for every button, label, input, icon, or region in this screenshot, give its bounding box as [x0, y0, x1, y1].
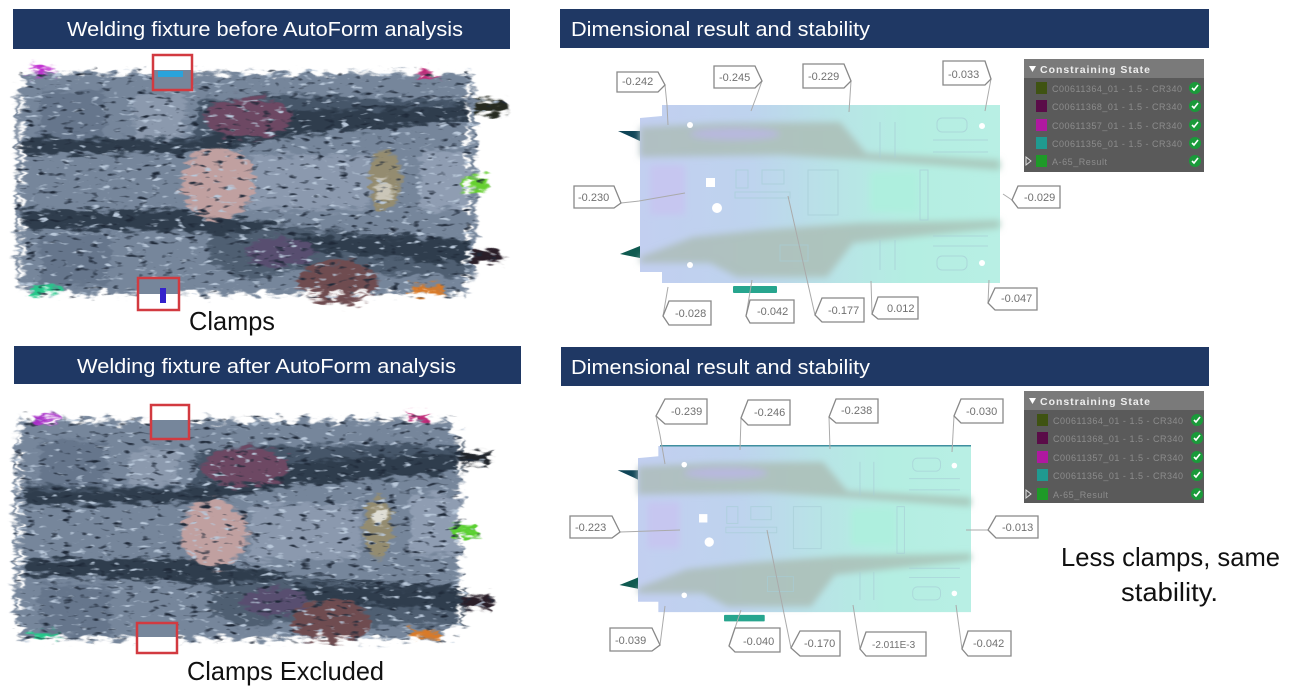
conclusion text: stability. — [1121, 577, 1218, 607]
excluded clamp bottom — [137, 623, 177, 653]
callouts bottom: -0.039 — [615, 635, 646, 647]
callouts top: 0.012 — [887, 303, 915, 315]
legend: constraining state bottom: C00611364_01 - 1.5 - CR340 — [1053, 416, 1183, 426]
image: welding fixture after analysis — [14, 405, 491, 653]
clamp top patch — [153, 55, 192, 90]
callouts bottom: -0.013 — [1002, 522, 1033, 534]
callouts bottom: -2.011E-3 — [872, 640, 916, 651]
header: dimensional result top: Dimensional result and stability — [571, 19, 870, 41]
legend: constraining state bottom: C00611357_01 - 1.5 - CR340 — [1053, 453, 1183, 463]
clamp bottom patch — [138, 278, 179, 310]
callouts top: -0.177 — [828, 305, 859, 317]
dimensional result bottom — [570, 399, 1038, 656]
callouts bottom: -0.246 — [754, 407, 785, 419]
header: welding fixture after: Welding fixture after AutoForm analysis — [77, 356, 456, 378]
caption: Clamps: Clamps — [189, 306, 275, 336]
callouts top: -0.033 — [948, 69, 979, 81]
callouts top: -0.242 — [622, 76, 653, 88]
header: welding fixture before — [13, 9, 510, 49]
callouts top: -0.230 — [578, 192, 609, 204]
callouts bottom: -0.040 — [743, 636, 774, 648]
legend: constraining state top: C00611357_01 - 1.5 - CR340 — [1052, 121, 1182, 131]
legend: constraining state bottom: A-65_Result — [1053, 490, 1108, 500]
legend: constraining state top: A-65_Result — [1052, 157, 1107, 167]
callouts bottom: -0.042 — [973, 638, 1004, 650]
callouts top: -0.047 — [1001, 293, 1032, 305]
callouts top: -0.028 — [675, 308, 706, 320]
conclusion text: Less clamps, same — [1061, 542, 1280, 572]
legend: constraining state bottom: Constraining State — [1040, 396, 1150, 408]
callouts top: -0.042 — [757, 306, 788, 318]
callouts top: -0.245 — [719, 72, 750, 84]
legend: constraining state top: Constraining State — [1040, 64, 1150, 76]
callouts top: -0.229 — [808, 71, 839, 83]
header: welding fixture after — [14, 346, 521, 384]
caption: Clamps Excluded: Clamps Excluded — [187, 656, 384, 686]
legend: constraining state top: C00611356_01 - 1.5 - CR340 — [1052, 139, 1182, 149]
callouts bottom: -0.223 — [575, 522, 606, 534]
conclusion text — [1061, 542, 1280, 607]
callouts bottom: -0.030 — [966, 406, 997, 418]
legend: constraining state top — [1024, 59, 1204, 172]
callouts top: -0.029 — [1024, 192, 1055, 204]
callouts bottom: -0.238 — [841, 405, 872, 417]
header: dimensional result bottom — [561, 347, 1209, 386]
legend: constraining state top: C00611364_01 - 1.5 - CR340 — [1052, 84, 1182, 94]
excluded clamp top — [151, 405, 189, 439]
callouts top — [574, 61, 1060, 325]
dimensional result top — [574, 61, 1060, 325]
image: welding fixture before analysis — [16, 55, 505, 310]
callouts bottom: -0.170 — [804, 638, 835, 650]
header: dimensional result bottom: Dimensional result and stability — [571, 357, 870, 379]
callouts bottom — [570, 399, 1038, 656]
header: dimensional result top — [560, 9, 1209, 48]
callouts bottom: -0.239 — [671, 406, 702, 418]
legend: constraining state top: C00611368_01 - 1.5 - CR340 — [1052, 102, 1182, 112]
legend: constraining state bottom — [1024, 391, 1204, 503]
legend: constraining state bottom: C00611368_01 - 1.5 - CR340 — [1053, 434, 1183, 444]
legend: constraining state bottom: C00611356_01 - 1.5 - CR340 — [1053, 471, 1183, 481]
header: welding fixture before: Welding fixture before AutoForm analysis — [67, 19, 463, 41]
